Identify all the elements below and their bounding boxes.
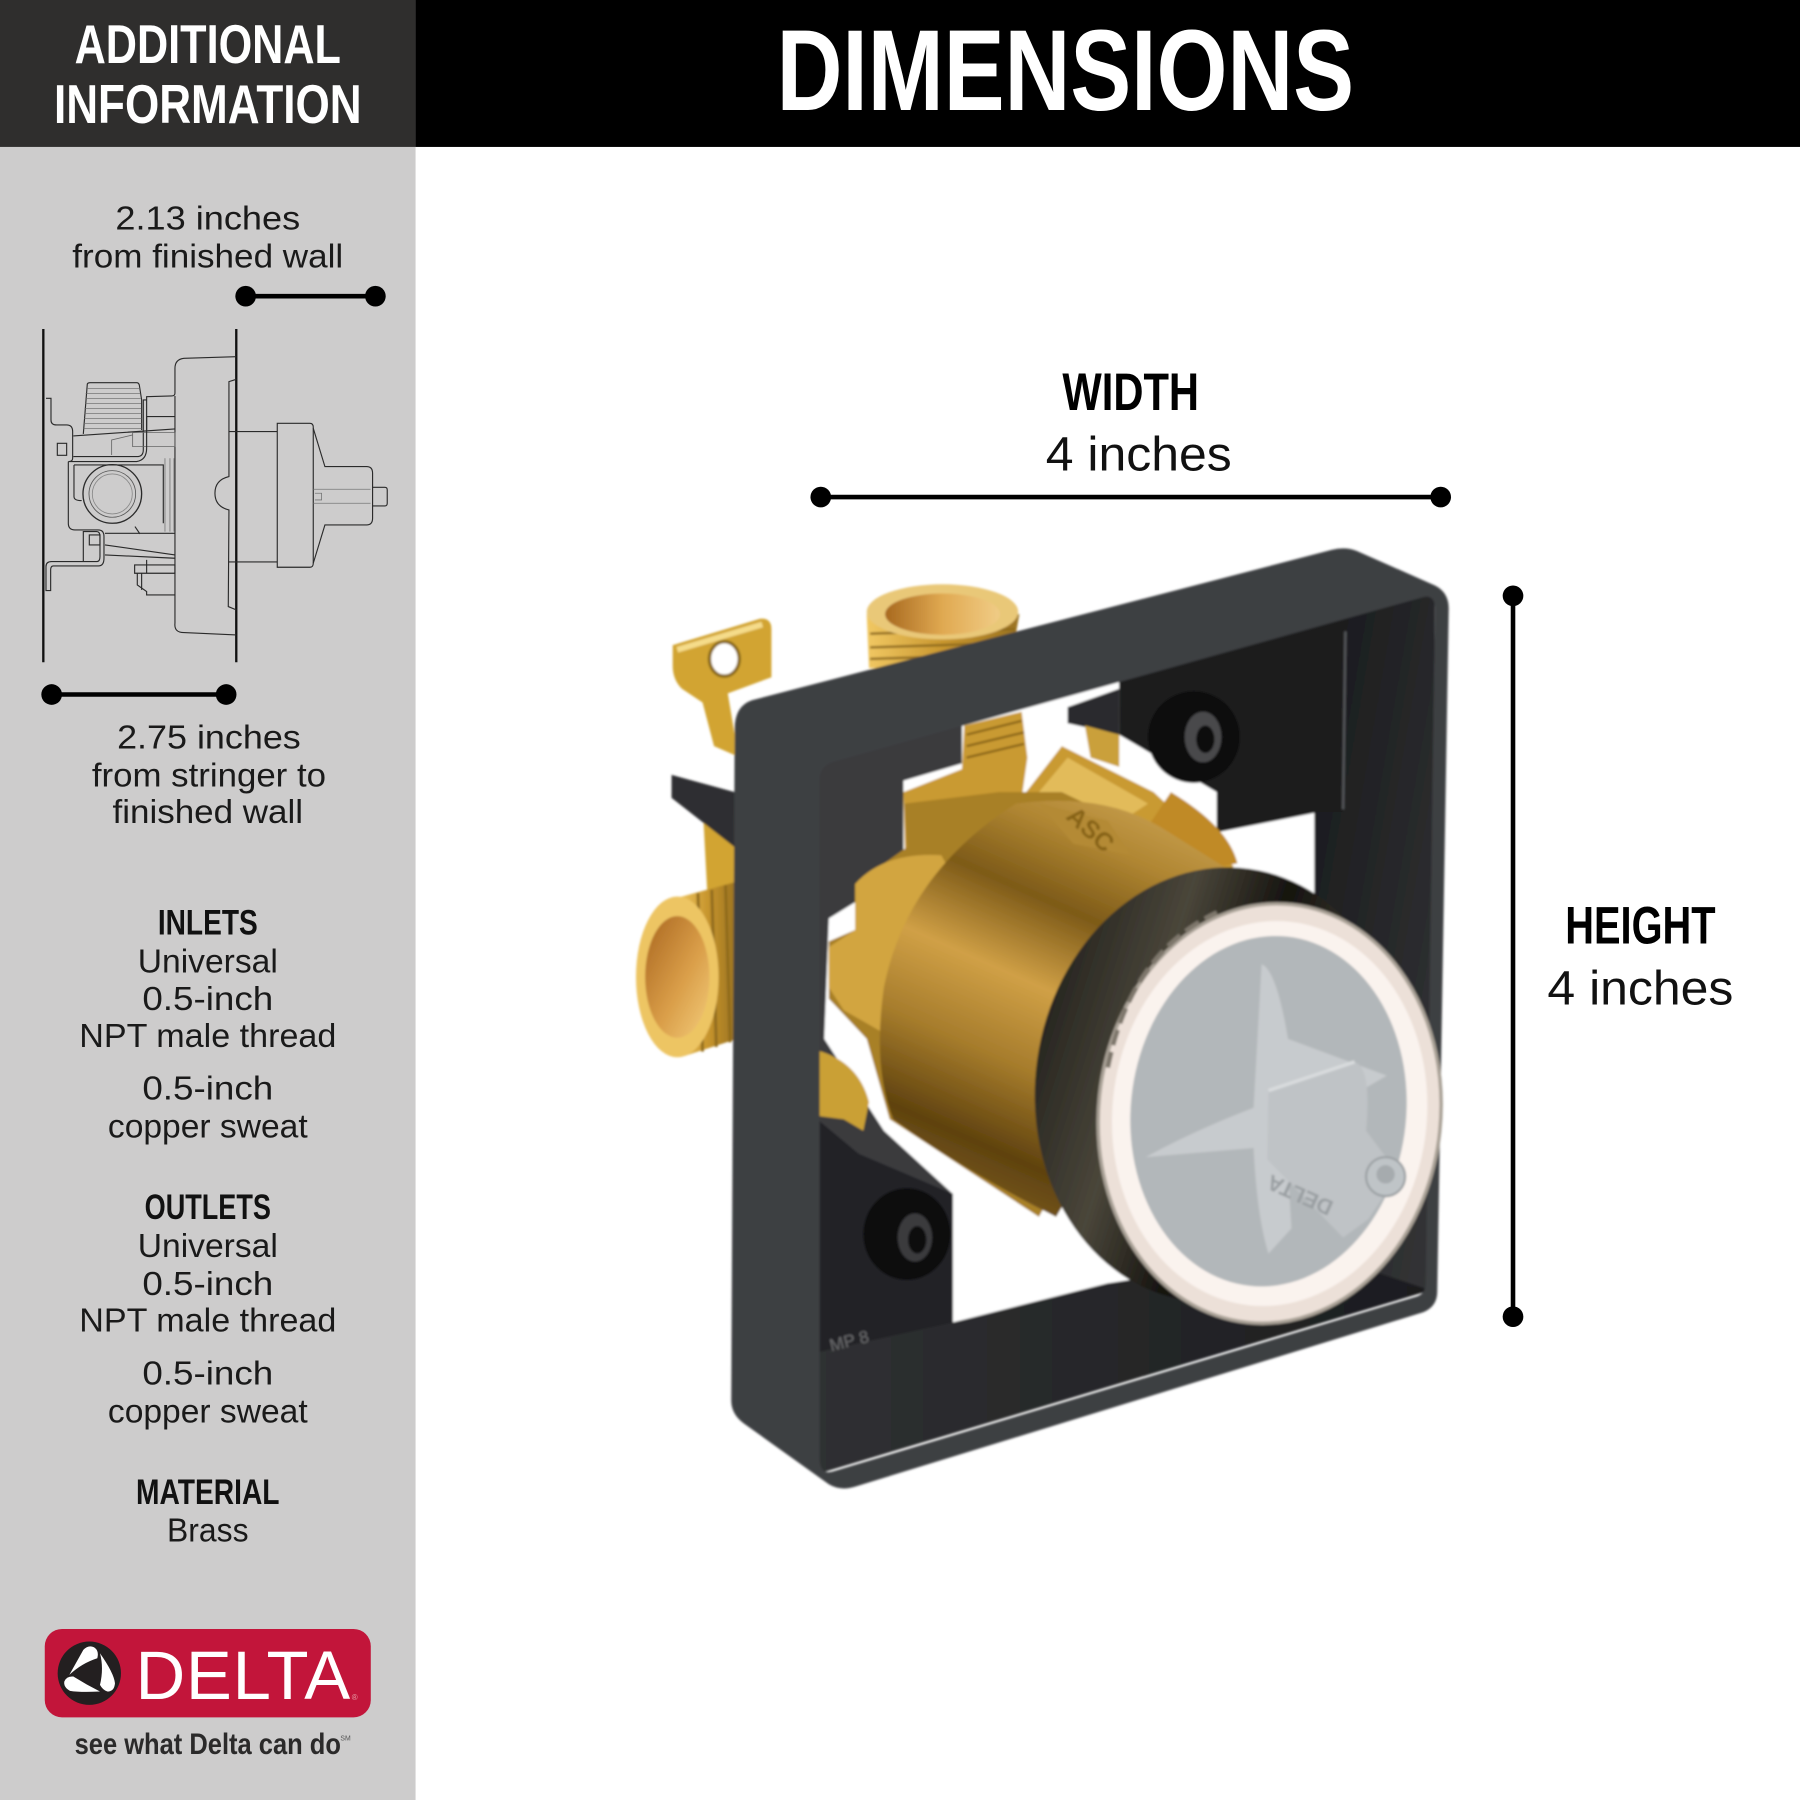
side-view line drawing of the valve [43, 329, 387, 662]
top right fastener [1148, 691, 1240, 783]
text block: inlets [79, 902, 336, 1146]
text block: material: Brass [167, 1513, 249, 1550]
frame front band [731, 548, 1449, 1488]
text: stringer depth [92, 719, 326, 831]
chrome ring [1078, 887, 1462, 1340]
logo: Delta: ® [352, 1693, 358, 1702]
right inner wall [1314, 592, 1435, 1295]
chrome reflection [1108, 913, 1217, 1068]
tagline: SM [340, 1735, 351, 1742]
text block: inlets: Universal [138, 943, 278, 980]
heading: additional information: ADDITIONAL [75, 13, 341, 75]
height label: HEIGHT [1565, 897, 1716, 956]
text block: outlets: 0.5-inch [142, 1266, 273, 1303]
text block: inlets: 0.5-inch [142, 1071, 273, 1108]
text: finished wall depth [72, 201, 343, 275]
height label: 4 inches [1547, 961, 1733, 1015]
lower brass bracket [817, 1050, 869, 1131]
text block: inlets: INLETS [158, 902, 258, 942]
text: finished wall depth: 2.13 inches [115, 201, 300, 238]
text: stringer depth: finished wall [113, 794, 303, 831]
width label [1046, 363, 1232, 482]
brass mounting bracket [673, 619, 771, 890]
top outlet port [867, 584, 1019, 668]
bottom inner wall [817, 1251, 1430, 1474]
heading: additional information [0, 0, 416, 147]
width label: 4 inches [1046, 428, 1232, 482]
bottom left fastener [863, 1188, 951, 1280]
text block: material [136, 1472, 280, 1550]
valve body [829, 792, 1251, 1217]
moulded text MP 8: MP 8 [827, 1326, 871, 1355]
dimension line: width [810, 487, 1451, 507]
logo: Delta: DELTA [135, 1637, 350, 1714]
text block: inlets: copper sweat [108, 1109, 308, 1146]
openings in back plate [824, 677, 1314, 1322]
height label [1547, 897, 1733, 1015]
text: stringer depth: 2.75 inches [117, 719, 301, 756]
dark clip top right [1068, 689, 1119, 735]
text block: outlets: Universal [138, 1228, 278, 1265]
text block: outlets: copper sweat [108, 1393, 308, 1430]
heading: additional information: INFORMATION [54, 73, 362, 135]
text: stringer depth: from stringer to [92, 757, 326, 794]
text block: material: MATERIAL [136, 1472, 280, 1512]
title bar: dimensions: DIMENSIONS [777, 7, 1354, 135]
text block: inlets: 0.5-inch [142, 981, 273, 1018]
left inlet port [636, 882, 737, 1057]
text block: outlets [79, 1187, 336, 1430]
tagline: see what Delta can do [75, 1728, 341, 1761]
title bar: dimensions [416, 0, 1800, 147]
dimension line: 2.75 inches [41, 684, 236, 705]
text block: inlets: NPT male thread [79, 1018, 336, 1055]
panel: additional information [0, 0, 416, 1800]
icon: Delta emblem [58, 1642, 121, 1705]
bottom left plate block [817, 1119, 953, 1355]
back plate [804, 608, 1349, 1395]
valve body: ASC [1061, 802, 1119, 858]
bracket hole [709, 642, 739, 676]
logo: Delta [45, 1629, 371, 1717]
text block: outlets: OUTLETS [145, 1187, 271, 1227]
brass neck below top port [903, 712, 1238, 918]
width label: WIDTH [1062, 363, 1199, 422]
text: finished wall depth: from finished wall [72, 238, 343, 275]
grey cap [1113, 922, 1424, 1300]
dimension line: height [1503, 585, 1523, 1327]
dimension line: 2.13 inches [235, 286, 386, 307]
black collar [1007, 843, 1431, 1326]
product illustration: rough-in valve in mud guard [636, 548, 1462, 1488]
top right plate block [1119, 608, 1355, 832]
grey cap: DELTA [1263, 1169, 1337, 1221]
dark clip behind frame [672, 775, 735, 847]
text block: outlets: NPT male thread [79, 1303, 336, 1340]
text block: outlets: 0.5-inch [142, 1355, 273, 1392]
